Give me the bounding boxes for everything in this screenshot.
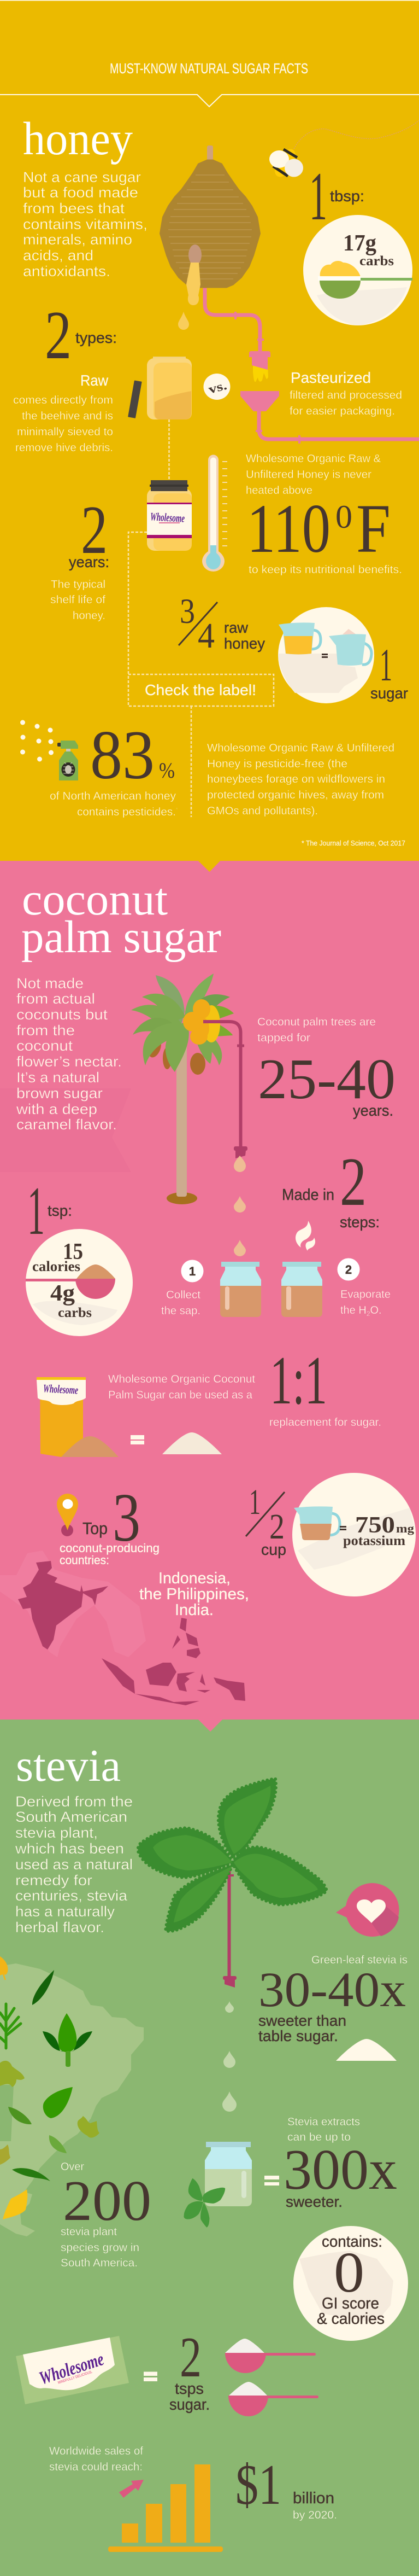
stat: over 200 species [61,2161,151,2269]
stat: 1 tbsp: 1 [309,159,327,235]
stat: 30-40x sweeter: table sugar. [258,2027,338,2044]
stat: $1 billion by 2020: billion [293,2490,334,2507]
icon: coconut sugar packet and piles [37,1377,222,1457]
icon: stevia packet [16,2336,129,2404]
icon: pink honey pipe [205,284,419,444]
stat: 2 years shelf life [50,492,109,622]
text block: pesticide free: protected organic hives, away from [207,789,384,801]
stat: made in 2 steps: Made in [282,1186,334,1204]
stat: three quarters raw honey [179,592,265,656]
text block: honey intro [23,169,147,279]
panel: coconut palm sugar background [0,861,419,1732]
text block: pasteurized [290,369,402,417]
circle: contains 0 GI score and calories: contains: [322,2233,382,2251]
icon: stem and nozzle [223,1870,237,1988]
step 1: collect the sap: Collect [166,1289,200,1301]
step 1: collect the sap [161,1260,203,1317]
stat: $1 billion by 2020: by 2020. [293,2509,337,2521]
text: keep nutritional benefits: to keep its nutritional benefits. [249,564,402,576]
stat: 300x sweeter: can be up to [287,2131,351,2143]
text block: coconut intro: coconuts but [16,1006,108,1023]
stat: tapped for 25-40 years: years. [353,1102,393,1119]
icon: heart speech bubble [336,1883,399,1937]
text block: stevia intro: herbal flavor. [15,1919,104,1936]
stat: 1:1 replacement: 1:1 [270,1343,327,1419]
icon: stevia packet: Wholesome [37,2349,107,2389]
text block: pesticide free [207,742,394,817]
circle: 750mg potassium: mg [396,1522,414,1535]
circle: contains 0 GI score and calories [293,2226,408,2341]
step 2: evaporate the water: 2 [345,1263,352,1277]
icon: jar step 2 [281,1262,322,1317]
text block: pesticide free: honeybees forage on wildflowers in [207,773,385,785]
stat: 2 years shelf life: The typical [51,579,105,591]
stat: 1 tsp: 1 [27,1173,45,1249]
step 2: evaporate the water [338,1258,391,1318]
step 2: evaporate the water: 2 [367,1310,370,1318]
circle: contains 0 GI score and calories: & calories [317,2310,385,2328]
stat: 2 years shelf life: shelf life of [50,594,105,606]
arrow: upward trend [119,2480,144,2498]
stat: top 3 coconut-producing countries: Top [82,1519,108,1538]
stat: 2 years shelf life: years: [69,553,109,570]
circle: 17g carbs [303,215,412,325]
stat: top 3 coconut-producing countries: countries: [60,1553,109,1567]
step 2: evaporate the water: Evaporate [340,1289,391,1301]
text block: never heated above: Unfiltered Honey is never [246,469,371,481]
stat: 2 years shelf life: 2 [81,492,108,568]
icon: vs badge: vs. [207,378,228,397]
text block: never heated above [246,453,381,497]
icon: sugar pile [336,2039,397,2061]
circle: 15 calories 4g carbs: carbs [58,1306,92,1320]
step 1: collect the sap: 1 [189,1264,196,1278]
icon: vs badge [203,374,231,400]
step 2: evaporate the water: O. [370,1304,382,1316]
text block: honey intro: Not a cane sugar [23,169,141,185]
text block: coconut intro: coconut [16,1038,73,1054]
icon: coconut palm tree [131,974,234,1204]
icon: thermometer [202,455,227,572]
stat: top 3 coconut-producing countries: 3 [113,1480,140,1556]
stat: 2 types: types: [75,329,117,346]
text block: stevia intro: used as a natural [15,1856,133,1873]
stat: 2 types [45,298,117,374]
callout: check the label [128,674,274,706]
text: worldwide sales: Worldwide sales of [49,2445,143,2457]
stat: over 200 species: Over [61,2161,84,2173]
text block: raw honey: comes directly from [13,394,113,406]
bar chart: growing sales [108,2464,223,2552]
stat: 1:1 replacement: Palm Sugar can be used as a [108,1389,253,1401]
stat: 2 years shelf life: honey. [73,610,105,622]
text block: pasteurized: for easier packaging. [290,405,395,417]
stat: half cup: 1 [249,1482,261,1522]
stat: 2 types: 2 [45,298,72,374]
stat: 1 tbsp [309,159,364,235]
heading: coconut palm sugar: coconut [22,874,168,925]
icon: pesticide spray bottle [20,720,78,780]
stat: top 3 coconut-producing countries: coconut-producing [60,1541,160,1555]
section: coconut palm sugar [0,874,416,1705]
stat: 2 tsps sugar: sugar. [169,2396,210,2414]
circle: measuring cups [278,607,374,703]
stat: over 200 species: species grow in [61,2242,139,2254]
icon: beehive [161,145,260,330]
text block: honey intro: acids, and [23,247,93,264]
stat: three quarters raw honey: 4 [198,616,215,656]
stat: 110 degrees F: 110 [247,491,331,567]
text block: coconut intro: brown sugar [16,1085,103,1101]
text block: never heated above: Wholesome Organic Raw & [246,453,381,465]
circle: 750mg potassium: potassium [343,1534,405,1548]
footnote: * The Journal of Science, Oct 2017 [302,839,405,847]
circle: 15 calories 4g carbs: calories [32,1258,80,1274]
text block: pesticide free: Wholesome Organic Raw & Unfiltered [207,742,394,754]
stat: 83 percent: contains pesticides. [77,806,176,818]
stat: 30-40x sweeter [258,1954,408,2044]
text block: honey intro: from bees that [23,200,125,217]
stat: 83 percent [50,717,178,818]
circle: 750mg potassium: 750 [355,1513,395,1538]
text: country names [139,1570,249,1619]
text block: honey intro: antioxidants. [23,263,110,279]
icon: jar step 1 [220,1262,261,1317]
stat: $1 billion by 2020 [235,2452,337,2521]
text block: honey intro: minerals, amino [23,231,132,248]
text block: pasteurized: filtered and processed [290,389,402,401]
text block: coconut intro: flower’s nectar. [16,1053,122,1070]
stat: made in 2 steps: 2 [340,1144,367,1220]
icon: two teaspoons of sugar [225,2339,318,2416]
text block: stevia intro: South American [15,1809,127,1825]
text block: raw honey: minimally sieved to [17,426,113,438]
icon: pink nozzle and funnel [240,351,279,411]
stat: 300x sweeter: 300x [284,2137,397,2201]
icon: stevia jar with leaf [169,2142,279,2233]
title: MUST-KNOW NATURAL SUGAR FACTS [110,60,308,77]
step 2: evaporate the water: the H [340,1304,367,1316]
section: stevia [0,1740,408,2552]
circle: 17g carbs: 17g [343,231,376,256]
icon: stevia drops [222,2001,237,2112]
step 1: collect the sap: the sap. [161,1305,200,1317]
panel: stevia background [0,1720,419,2576]
stat: 83 percent: of North American honey [50,790,176,802]
stat: tapped for 25-40 years: tapped for [257,1032,310,1044]
panel: honey background [0,0,419,861]
text: worldwide sales [49,2445,143,2473]
text: country names: India. [175,1601,214,1619]
stat: tapped for 25-40 years: Coconut palm trees are [257,1016,376,1028]
text block: coconut intro: with a deep [16,1101,97,1117]
circle: 750mg potassium [292,1473,416,1596]
icon: steam [296,1221,315,1251]
text block: coconut intro: from the [16,1022,75,1039]
text: worldwide sales: stevia could reach: [49,2461,143,2473]
stat: 30-40x sweeter: Green-leaf stevia is [311,1954,408,1966]
text block: stevia intro: centuries, stevia [15,1887,128,1904]
text block: coconut intro: Not made [16,975,84,992]
stat: 83 percent: 83 [90,717,155,794]
heading: coconut palm sugar [21,874,221,963]
circle: 15 calories 4g carbs: 15 [63,1239,83,1264]
stat: 1 sugar: 1 [380,639,392,691]
text: country names: the Philippines, [139,1586,249,1603]
stat: 300x sweeter [284,2116,397,2210]
text block: honey intro: but a food made [23,184,138,201]
icon: stevia packet: MINDFULLY DELICIOUS. [57,2370,93,2385]
callout: check the label: Check the label! [145,681,256,698]
icon: sap tap pipe and drops [203,1022,247,1256]
stat: 83 percent: * [176,807,178,812]
stat: tapped for 25-40 years [257,1016,396,1119]
text block: pesticide free: Honey is pesticide-free (the [207,758,347,770]
stat: 1:1 replacement: Wholesome Organic Coconut [108,1373,255,1385]
text block: raw honey: the beehive and is [22,410,113,422]
stat: over 200 species: 200 [63,2169,151,2233]
icon: Wholesome honey jar: Wholesome [150,510,185,525]
text block: stevia intro: stevia plant, [15,1825,98,1841]
text block: coconut intro: from actual [16,990,95,1007]
stat: half cup: 2 [269,1507,285,1547]
text: country names: Indonesia, [158,1570,231,1587]
stat: over 200 species: stevia plant [61,2226,117,2238]
stat: $1 billion by 2020: $1 [235,2452,281,2516]
stat: tapped for 25-40 years: 25-40 [258,1047,396,1111]
text block: raw honey [13,372,113,454]
map: South America with leaves [0,1956,144,2236]
icon: Wholesome honey jar [147,480,192,551]
text block: honey intro: contains vitamins, [23,216,147,232]
stat: half cup [246,1482,286,1559]
stat: 110 degrees F: 0 [335,499,352,535]
text block: stevia intro: which has been [15,1840,124,1857]
heading: coconut palm sugar: palm sugar [21,912,221,963]
circle: contains 0 GI score and calories: 0 [334,2240,364,2304]
stat: 2 tsps sugar: tsps [175,2380,204,2398]
heading: honey: honey [23,112,133,165]
text block: stevia intro: remedy for [15,1872,92,1889]
text block: stevia intro: has a naturally [15,1903,115,1920]
map: South and Southeast Asia [0,1551,245,1705]
stat: half cup: cup [261,1541,286,1559]
circle: 15 calories 4g carbs [26,1229,133,1336]
text block: stevia intro [15,1793,133,1936]
stat: 30-40x sweeter: sweeter than [258,2012,346,2029]
stat: 300x sweeter: Stevia extracts [287,2116,360,2128]
icon: coconut sugar packet and piles: Wholesome [43,1382,79,1397]
text block: coconut intro: caramel flavor. [16,1116,117,1133]
stat: 1 tsp: tsp: [48,1202,72,1219]
icon: open honey jar [128,357,192,419]
stat: over 200 species: South America. [61,2257,138,2269]
text block: raw honey: remove hive debris. [15,442,113,454]
stat: 2 tsps sugar [169,2325,210,2414]
stat: three quarters raw honey: 3 [180,592,195,631]
icon: bee with flight path [269,120,419,180]
text block: pasteurized: Pasteurized [291,369,371,386]
text block: never heated above: heated above [246,485,312,497]
circle: 17g carbs: carbs [359,254,394,269]
stat: 1 sugar: sugar [370,685,408,702]
text block: stevia intro: Derived from the [15,1793,133,1810]
heading: stevia: stevia [16,1740,121,1791]
stat: three quarters raw honey: raw [224,619,249,636]
text block: pesticide free: GMOs and pollutants). [207,805,318,817]
circle: 15 calories 4g carbs: 4g [50,1281,75,1306]
stat: made in 2 steps: steps: [340,1214,380,1231]
text block: coconut intro: It’s a natural [16,1069,99,1086]
stat: 83 percent: % [159,758,175,783]
icon: stevia leaves [138,1779,327,1931]
stat: made in 2 steps [282,1144,380,1231]
stat: 2 tsps sugar: 2 [180,2325,202,2389]
stat: 1 sugar [370,639,408,702]
stat: 1:1 replacement [108,1343,381,1429]
text block: raw honey: Raw [80,372,109,389]
stat: 1:1 replacement: replacement for sugar. [269,1417,381,1429]
stat: three quarters raw honey: honey [224,635,265,652]
circle: contains 0 GI score and calories: GI score [322,2295,379,2312]
stat: 1 tbsp: tbsp: [330,188,364,205]
section: honey [13,112,419,847]
stat: top 3 coconut-producing countries [57,1480,160,1567]
stat: 300x sweeter: sweeter. [286,2193,343,2210]
text block: coconut intro [16,975,122,1133]
stat: 30-40x sweeter: 30-40x [258,1963,406,2017]
stat: 110 degrees F: F [356,491,391,567]
